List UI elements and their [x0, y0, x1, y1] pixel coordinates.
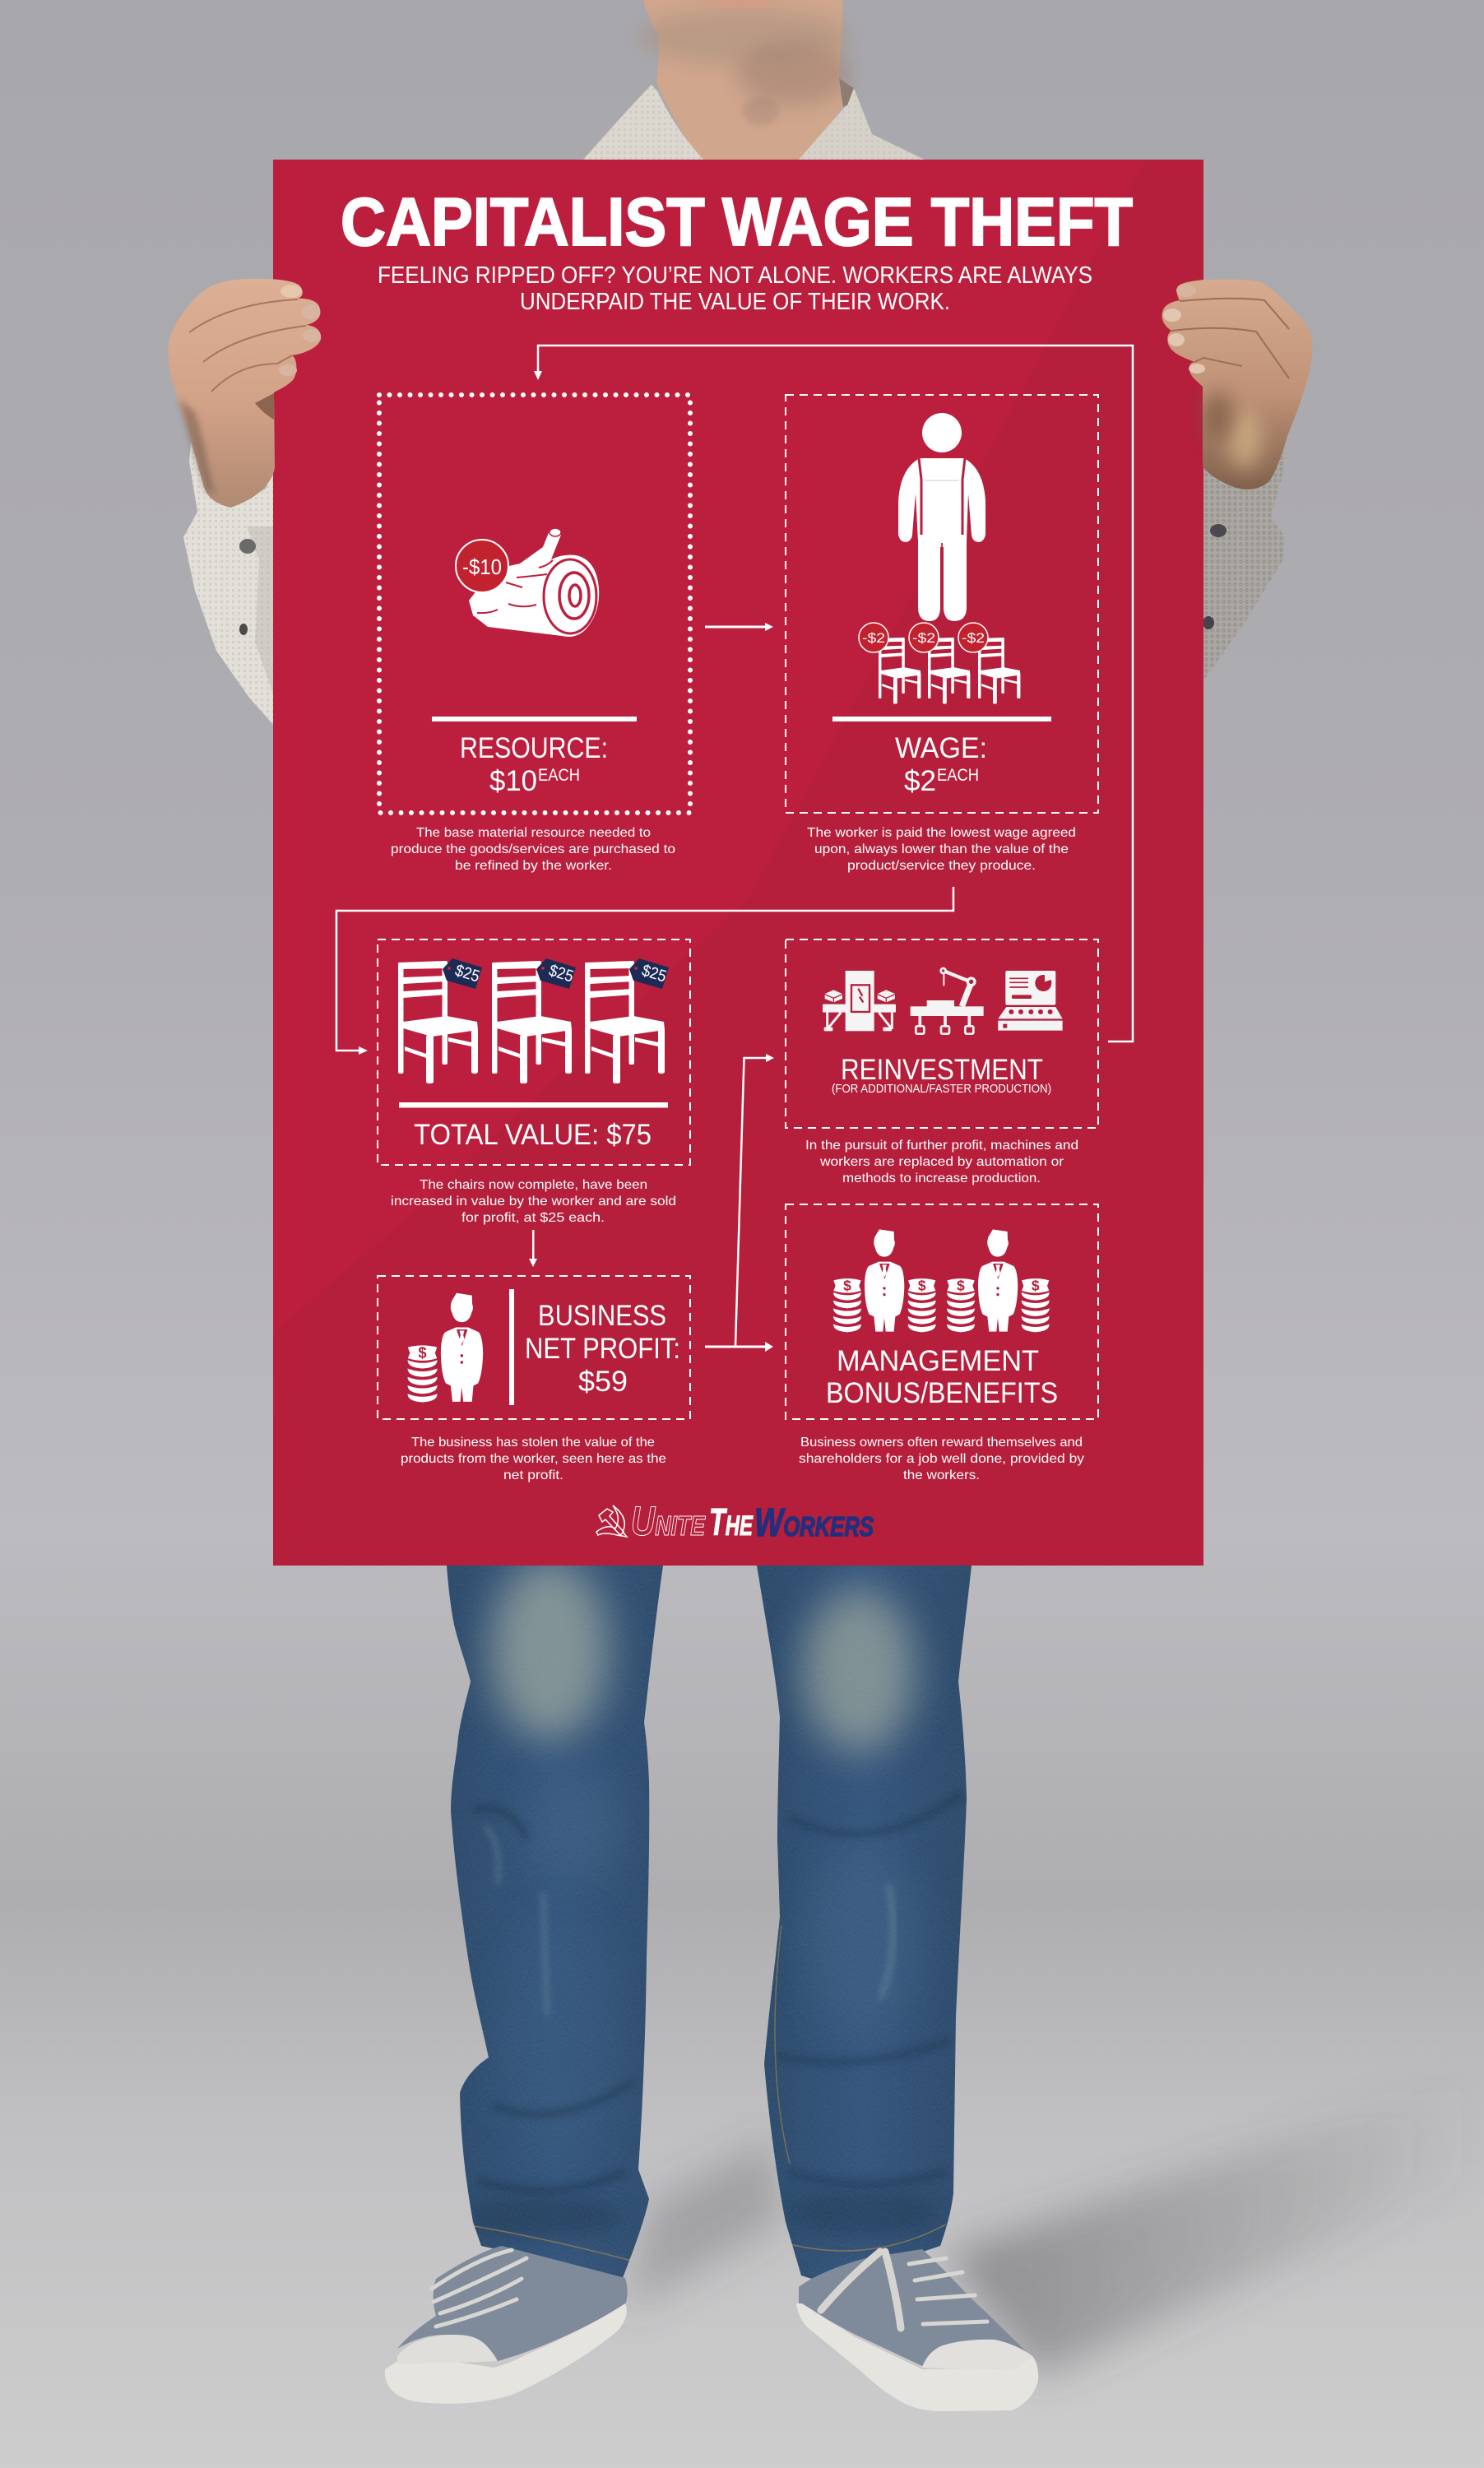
text: wage description: The worker is paid the lowest wage agreed: [807, 826, 1076, 840]
icon: log: [456, 528, 599, 637]
text: management description: Business owners often reward themselves and: [800, 1436, 1083, 1450]
subtitle: FEELING RIPPED OFF? YOU’RE NOT ALONE. WORKERS ARE ALWAYS: [378, 262, 1092, 289]
arrow: total value to net profit: [529, 1230, 537, 1267]
arrow: wage to total value: [336, 887, 953, 1055]
photo: shirt collar: [582, 78, 926, 160]
panel: reinvestment: [786, 939, 1098, 1128]
subtitle: UNDERPAID THE VALUE OF THEIR WORK.: [520, 289, 950, 315]
title: CAPITALIST WAGE THEFT: [341, 183, 1133, 260]
text: total value description: for profit, at $25 each.: [461, 1211, 605, 1225]
photo: left shirt sleeve: [183, 443, 275, 726]
icon: businessman and coins: $: [418, 1344, 427, 1362]
label: wage: WAGE:: [895, 732, 987, 764]
logo: Unite The Workers: UNITE: [631, 1498, 706, 1544]
label: resource: $10: [489, 765, 537, 797]
badges: -$2: [859, 623, 988, 652]
text: business description: products from the worker, seen here as the: [401, 1452, 666, 1466]
badges: -$2: -$2: [962, 630, 985, 646]
text: business description: [401, 1436, 666, 1482]
label: resource: EACH: [538, 766, 580, 785]
label: business net profit: [525, 1300, 680, 1398]
text: wage description: product/service they produce.: [847, 859, 1036, 873]
poster: [273, 160, 1203, 1566]
label: reinvestment: REINVESTMENT: [841, 1054, 1043, 1086]
text: business description: The business has stolen the value of the: [411, 1436, 655, 1450]
text: management description: shareholders for a job well done, provided by: [799, 1452, 1084, 1466]
photo: jeans right leg: [753, 1563, 975, 2287]
icon: businessman and coins: [407, 1293, 483, 1403]
icon: worker: [898, 413, 985, 621]
label: reinvestment: [832, 1054, 1051, 1096]
icon: chair with tag 1: [398, 958, 482, 1083]
photo: neck and chin: [638, 0, 851, 160]
icon: managers and coins right: $: [957, 1278, 965, 1294]
text: reinvestment description: [805, 1139, 1078, 1185]
photo: right shoe: [796, 2249, 1038, 2411]
label: business net profit: NET PROFIT:: [525, 1333, 680, 1365]
panel: business net profit: [378, 1276, 690, 1419]
icon: computer: [998, 971, 1063, 1031]
text: reinvestment description: In the pursuit of further profit, machines and: [805, 1139, 1078, 1153]
icon: managers and coins left: [833, 1229, 936, 1332]
badge: -$10: -$10: [462, 554, 502, 579]
logo: Unite The Workers: WORKERS: [754, 1501, 874, 1545]
arrow: reinvestment back to resource: [534, 346, 1133, 1041]
photo: left shoe: [385, 2246, 628, 2404]
label: business net profit: $59: [578, 1366, 628, 1398]
icon: managers and coins right: [947, 1229, 1050, 1332]
icon: hammer and sickle: [596, 1505, 627, 1537]
icon: production machine: [823, 971, 896, 1031]
label: wage: $2: [904, 765, 936, 797]
label: management: MANAGEMENT: [837, 1345, 1039, 1377]
icon: chair with tag 3: [585, 958, 669, 1083]
text: reinvestment description: workers are replaced by automation or: [819, 1155, 1064, 1169]
badges: -$2: -$2: [862, 630, 885, 646]
panel: wage: [786, 395, 1098, 813]
arrow: resource to wage: [705, 623, 773, 631]
label: business net profit: BUSINESS: [538, 1300, 666, 1332]
badges: -$2: -$2: [912, 630, 935, 646]
label: total value: TOTAL VALUE: $75: [414, 1119, 652, 1151]
logo: Unite The Workers: THE: [709, 1501, 754, 1543]
label: management: [826, 1345, 1058, 1409]
label: management: BONUS/BENEFITS: [826, 1377, 1058, 1409]
label: resource: RESOURCE:: [460, 732, 608, 764]
icon: managers and coins left: $: [843, 1278, 851, 1294]
photo: right shirt sleeve: [1202, 444, 1286, 683]
text: business description: net profit.: [503, 1468, 563, 1482]
photo: left hand: [168, 279, 321, 508]
icon: managers and coins left: $: [918, 1278, 926, 1294]
logo: Unite The Workers: [596, 1498, 874, 1545]
text: total value description: increased in value by the worker and are sold: [391, 1195, 676, 1208]
text: management description: [799, 1436, 1084, 1482]
arrow: net profit to reinvestment and management: [705, 1054, 774, 1352]
poster sheen: [273, 160, 1203, 1566]
text: total value description: [391, 1178, 676, 1225]
label: resource: [460, 732, 608, 797]
icon: chair with tag 3: $25: [640, 962, 669, 986]
panel: management bonus: [786, 1204, 1098, 1419]
label: wage: EACH: [937, 766, 979, 785]
text: reinvestment description: methods to increase production.: [842, 1171, 1041, 1185]
text: total value description: The chairs now complete, have been: [420, 1178, 647, 1192]
label: reinvestment: (FOR ADDITIONAL/FASTER PRODUCTION): [832, 1083, 1051, 1096]
text: wage description: [807, 826, 1076, 873]
floor shadows: [625, 2073, 1484, 2378]
photo: right hand: [1162, 280, 1313, 489]
subtitle: [378, 262, 1092, 315]
text: resource description: The base material resource needed to: [416, 826, 651, 840]
icon: chair with tag 2: $25: [547, 962, 576, 986]
panel: resource: [379, 395, 690, 813]
icon: robot arm: [911, 967, 984, 1034]
photo: jeans left leg: [447, 1566, 663, 2277]
badge: -$10: [456, 540, 508, 592]
text: resource description: be refined by the worker.: [455, 859, 612, 873]
text: wage description: upon, always lower than the value of the: [814, 842, 1069, 856]
text: resource description: produce the goods/services are purchased to: [391, 842, 675, 856]
text: management description: the workers.: [903, 1468, 980, 1482]
panel: total value: [378, 939, 690, 1165]
label: wage: [895, 732, 987, 797]
icon: chair with tag 2: [492, 958, 576, 1083]
icon: small chairs: [879, 638, 1020, 703]
text: resource description: [391, 826, 675, 873]
icon: chair with tag 1: $25: [453, 962, 482, 986]
icon: managers and coins right: $: [1032, 1278, 1040, 1294]
